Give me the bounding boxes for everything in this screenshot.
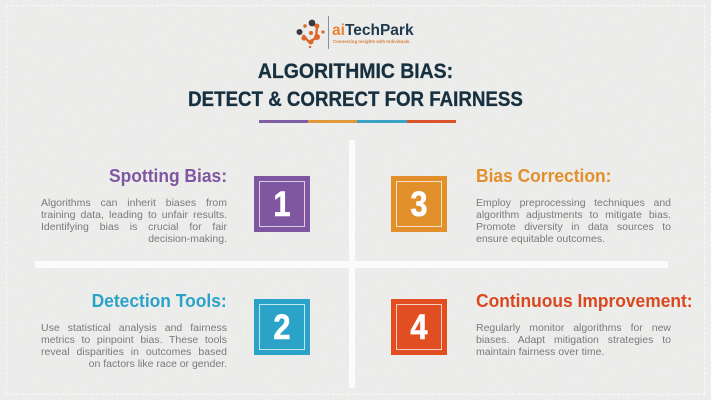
text block: Employ preprocessing techniques and [476,197,671,209]
text block: Regularly monitor algorithms for new [476,322,671,334]
text block: Use statistical analysis and fairness [41,322,227,334]
text block: biases. Adapt mitigation strategies to [476,334,671,346]
text block [476,322,671,358]
logo divider [328,16,329,49]
text block: metrics to pinpoint bias. These tools [41,334,227,346]
text block: decision-making. [148,233,227,245]
title [188,59,523,111]
heading: Spotting Bias: [109,166,227,186]
title: ALGORITHMIC BIAS: [258,59,453,83]
number box 3: 3 [410,185,428,224]
logo wordmark: aiTechPark [332,22,414,39]
logo [296,16,414,49]
text block: algorithm adjustments to mitigate bias. [476,209,671,221]
title: DETECT & CORRECT FOR FAIRNESS [188,87,523,111]
number box 3 [391,176,447,232]
text block: reveal disparities in outcomes based [41,346,227,358]
panel: bias correction [391,166,671,245]
text block [41,322,227,370]
panel: detection tools [41,291,310,370]
text block [41,197,227,245]
text block: training data, leading to unfair results. [41,209,227,221]
panel: continuous improvement [391,291,693,358]
text block: Identifying bias is crucial for fair [41,221,227,233]
number box 2 [254,299,310,355]
text block: Promote diversity in data sources to [476,221,671,233]
heading: Detection Tools: [92,291,227,311]
logo tagline: Connecting Insights with Individuals [333,39,409,44]
icon: logo network [296,20,325,48]
text block: on factors like race or gender. [89,358,227,370]
text block [476,197,671,245]
background cross divider [35,140,668,388]
number box 4: 4 [410,308,428,347]
number box 2: 2 [273,308,291,347]
heading: Bias Correction: [476,166,611,186]
text block: maintain fairness over time. [476,346,604,358]
number box 4 [391,299,447,355]
text block: Algorithms can inherit biases from [41,197,227,209]
number box 1: 1 [273,185,291,224]
heading: Continuous Improvement: [476,291,693,311]
colored title underline [259,120,456,123]
panel: spotting bias [41,166,310,245]
number box 1 [254,176,310,232]
text block: ensure equitable outcomes. [476,233,605,245]
